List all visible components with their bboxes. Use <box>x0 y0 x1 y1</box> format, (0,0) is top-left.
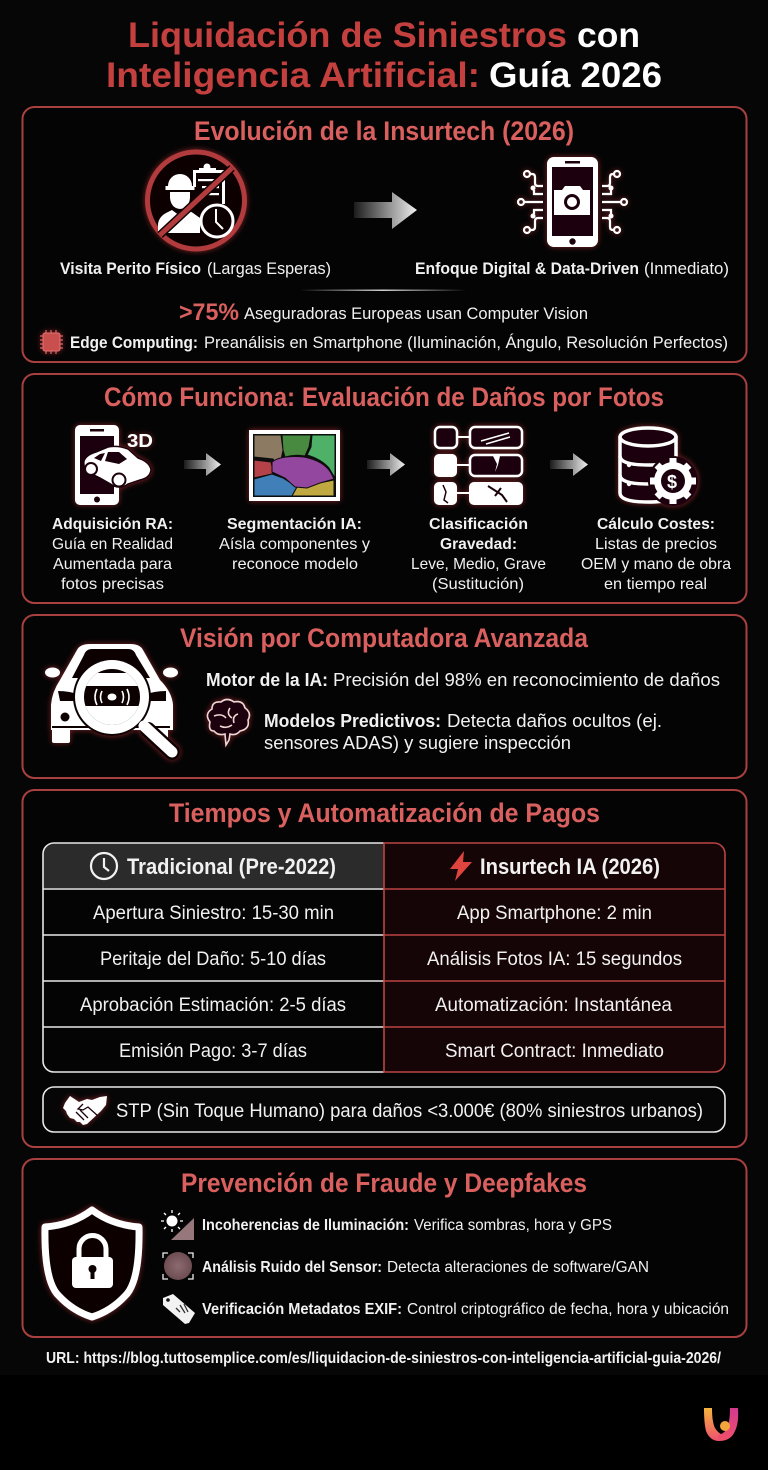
icon: escudo con candado <box>45 1210 139 1317</box>
text: modelos predictivos: Detecta daños ocultos (ej. <box>447 711 662 731</box>
icon: base de datos y coste <box>620 428 698 506</box>
icon: teléfono con coche 3D: 3D <box>127 431 153 451</box>
heading: visión: Visión por Computadora Avanzada <box>180 623 589 653</box>
header: insurtech IA: Insurtech IA (2026) <box>480 854 660 879</box>
stat: 75% aseguradoras: >75% <box>179 299 239 326</box>
step: clasificación gravedad <box>411 516 546 593</box>
text: modelos predictivos: sensores ADAS) y sugiere inspección <box>264 733 571 753</box>
step: segmentación IA: Aísla componentes y <box>219 536 370 553</box>
arrow: evolución <box>354 192 417 229</box>
arrow: paso 2 <box>367 453 405 476</box>
callout: STP <box>43 1087 725 1132</box>
icon: coche con lupa <box>45 644 178 752</box>
title: con <box>577 16 640 55</box>
title <box>106 16 662 95</box>
column: tradicional rows: Aprobación Estimación: 2-5 días <box>80 995 346 1016</box>
panel: tiempos y automatización <box>22 790 746 1147</box>
icon: reloj <box>91 853 117 879</box>
column: insurtech rows: Análisis Fotos IA: 15 segundos <box>427 949 682 970</box>
text: iluminación: Incoherencias de Iluminación: <box>202 1217 409 1234</box>
caption: visita perito físico: Visita Perito Físico <box>60 259 201 278</box>
step: cálculo costes: Listas de precios <box>595 536 717 553</box>
icon: sol y sombra <box>161 1210 194 1240</box>
column: insurtech rows: Smart Contract: Inmediato <box>445 1041 664 1062</box>
heading: evolución: Evolución de la Insurtech (2026) <box>194 116 574 146</box>
icon: rayo <box>450 851 472 881</box>
panel: visión por computadora <box>22 615 746 778</box>
icon: base de datos y coste: $ <box>667 472 677 492</box>
column: tradicional rows: Apertura Siniestro: 15-30 min <box>93 903 334 924</box>
panel: prevención de fraude <box>22 1159 746 1337</box>
step: adquisición RA: fotos precisas <box>61 576 164 593</box>
arrow: paso 3 <box>550 453 588 476</box>
step: cálculo costes: OEM y mano de obra <box>581 556 731 573</box>
title: Inteligencia Artificial: <box>106 56 480 95</box>
icon: imagen segmentada <box>249 430 340 501</box>
column: tradicional rows: Emisión Pago: 3-7 días <box>119 1041 307 1062</box>
step: adquisición RA: Guía en Realidad <box>52 536 173 553</box>
stat: 75% aseguradoras <box>179 299 588 326</box>
step: cálculo costes: Cálculo Costes: <box>597 516 715 533</box>
title: Liquidación de Siniestros <box>128 16 567 55</box>
header: tradicional: Tradicional (Pre-2022) <box>127 854 336 879</box>
column: insurtech rows: App Smartphone: 2 min <box>457 903 652 924</box>
column: insurtech rows: Automatización: Instantánea <box>435 995 672 1016</box>
panel: evolución de la insurtech <box>22 107 746 362</box>
step: cálculo costes <box>581 516 731 593</box>
text: motor de la IA: Motor de la IA: <box>206 670 328 690</box>
heading: prevención: Prevención de Fraude y Deepfakes <box>181 1168 587 1198</box>
text: iluminación <box>202 1217 612 1234</box>
text: edge computing: Preanálisis en Smartphone (Iluminación, Ángulo, Resolución Perfectos) <box>204 333 728 352</box>
heading: tiempos: Tiempos y Automatización de Pagos <box>169 798 600 828</box>
column: tradicional rows: Peritaje del Daño: 5-10 días <box>100 949 326 970</box>
arrow: paso 1 <box>184 453 221 476</box>
step: segmentación IA: Segmentación IA: <box>227 516 362 533</box>
step: clasificación gravedad: Gravedad: <box>440 536 517 553</box>
panel: cómo funciona <box>22 374 746 603</box>
step: clasificación gravedad: (Sustitución) <box>432 576 524 593</box>
icon: cerebro <box>207 700 249 745</box>
text: ruido del sensor <box>202 1259 649 1276</box>
step: segmentación IA <box>219 516 370 573</box>
step: cálculo costes: en tiempo real <box>604 576 707 593</box>
icon: perito físico prohibido <box>148 152 244 249</box>
icon: chip <box>40 330 63 354</box>
column: tradicional rows <box>80 903 346 1062</box>
caption: enfoque digital: Enfoque Digital & Data-Driven <box>415 259 639 278</box>
text: modelos predictivos <box>264 711 662 753</box>
heading: cómo funciona: Cómo Funciona: Evaluación de Daños por Fotos <box>104 382 664 412</box>
stat: 75% aseguradoras: Aseguradoras Europeas usan Computer Vision <box>244 304 588 323</box>
title: Guía 2026 <box>489 56 662 95</box>
text: metadatos EXIF: Verificación Metadatos EXIF: <box>202 1301 402 1318</box>
text: STP: STP (Sin Toque Humano) para daños <3.000€ (80% siniestros urbanos) <box>116 1101 703 1122</box>
text: motor de la IA: Precisión del 98% en reconocimiento de daños <box>333 670 720 690</box>
caption: visita perito físico <box>60 259 331 278</box>
step: adquisición RA <box>52 516 173 593</box>
caption: enfoque digital: (Inmediato) <box>644 259 729 278</box>
icon: apretón de manos <box>63 1096 107 1125</box>
step: clasificación gravedad: Leve, Medio, Grave <box>411 556 546 573</box>
text: edge computing: Edge Computing: <box>70 333 198 352</box>
icon: teléfono con coche 3D <box>75 425 153 505</box>
text: iluminación: Verifica sombras, hora y GPS <box>414 1217 612 1234</box>
icon: smartphone con cámara <box>518 157 627 247</box>
icon: etiqueta EXIF <box>163 1294 195 1324</box>
step: adquisición RA: Adquisición RA: <box>52 516 173 533</box>
text: ruido del sensor: Análisis Ruido del Sensor: <box>202 1259 382 1276</box>
step: clasificación gravedad: Clasificación <box>429 516 528 533</box>
text: metadatos EXIF: Control criptográfico de fecha, hora y ubicación <box>407 1301 729 1318</box>
column: insurtech rows <box>427 903 682 1062</box>
table: comparación <box>43 843 725 1072</box>
caption: visita perito físico: (Largas Esperas) <box>207 259 331 278</box>
step: segmentación IA: reconoce modelo <box>232 556 358 573</box>
icon: clasificación de gravedad <box>434 427 523 505</box>
icon: ruido del sensor <box>163 1252 193 1280</box>
text: metadatos EXIF <box>202 1301 729 1318</box>
text: modelos predictivos: Modelos Predictivos: <box>264 711 441 731</box>
text: ruido del sensor: Detecta alteraciones de software/GAN <box>387 1259 649 1276</box>
logo <box>704 1408 738 1441</box>
step: adquisición RA: Aumentada para <box>53 556 172 573</box>
